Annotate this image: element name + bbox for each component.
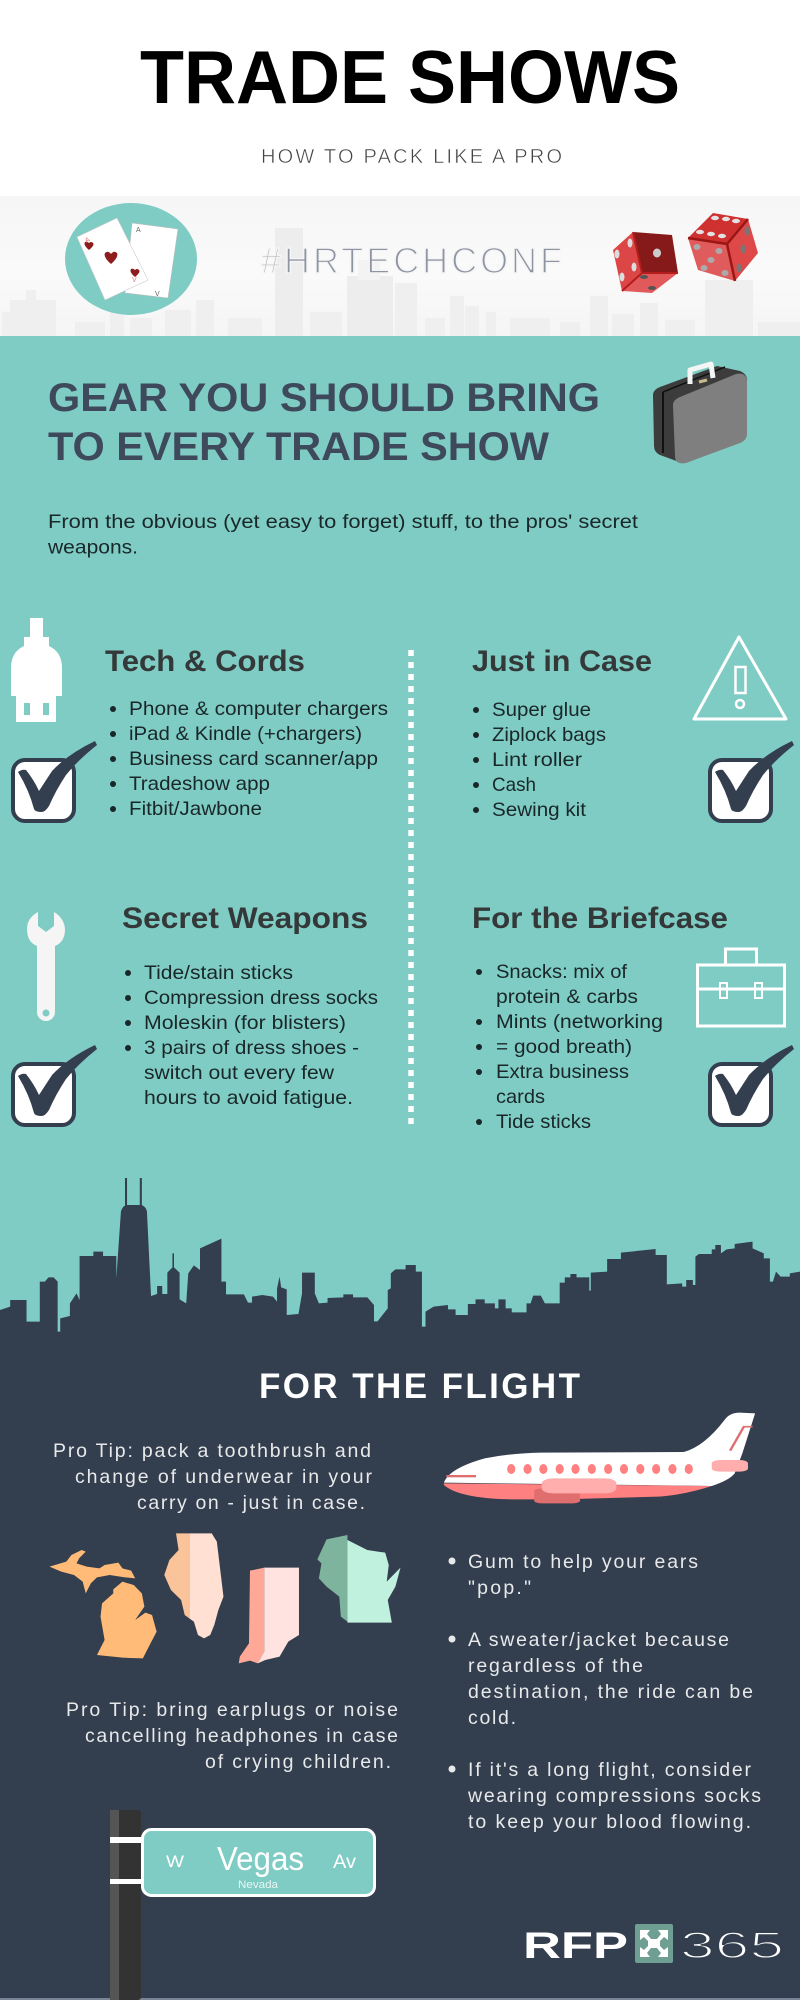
list: secret weapons: Compression dress socks: [144, 987, 378, 1009]
pro tip: toothbrush: change of underwear in your: [75, 1466, 372, 1488]
icon: briefcase outline: [697, 949, 785, 1026]
list: tech and cords: iPad & Kindle (+chargers): [129, 723, 362, 745]
subtitle: HOW TO PACK LIKE A PRO: [261, 146, 562, 168]
pro tip: toothbrush: carry on - just in case.: [137, 1492, 365, 1514]
heading: just in case: Just in Case: [472, 645, 652, 678]
pro tip: toothbrush: Pro Tip: pack a toothbrush and: [53, 1440, 371, 1462]
list: flight items: destination, the ride can be: [468, 1681, 753, 1703]
list: secret weapons: hours to avoid fatigue.: [144, 1087, 353, 1109]
icon: checkbox just in case: [710, 741, 794, 821]
list: tech and cords: Tradeshow app: [129, 773, 270, 795]
list: for the briefcase: Extra business: [496, 1061, 629, 1083]
list: for the briefcase: Tide sticks: [496, 1111, 591, 1133]
icon: street sign Vegas: W: [166, 1852, 184, 1871]
list: just in case: [473, 699, 606, 821]
list: just in case: Cash: [492, 774, 536, 796]
list: tech and cords: [110, 698, 388, 820]
heading: secret weapons: Secret Weapons: [122, 902, 368, 935]
pro tip: earplugs: cancelling headphones in case: [85, 1725, 398, 1747]
icon: four midwest states: [49, 1533, 401, 1663]
icon: checkbox briefcase: [710, 1045, 794, 1125]
icon: usb plug: [11, 618, 62, 722]
list: flight items: "pop.": [468, 1577, 531, 1599]
list: for the briefcase: [476, 961, 663, 1133]
intro text: weapons.: [47, 536, 138, 558]
list: secret weapons: 3 pairs of dress shoes -: [144, 1037, 359, 1059]
icon: street sign Vegas: Vegas: [217, 1840, 304, 1877]
hashtag: #HRTECHCONF: [261, 240, 562, 281]
heading: tech and cords: Tech & Cords: [105, 645, 305, 678]
pro tip: earplugs: Pro Tip: bring earplugs or noise: [66, 1699, 398, 1721]
icon: warning triangle: [694, 637, 786, 719]
city skyline silhouette: [0, 1178, 800, 1337]
pro tip: toothbrush: [53, 1440, 372, 1514]
list: just in case: Lint roller: [492, 749, 583, 771]
icon: playing cards in teal circle: [65, 203, 197, 315]
heading: for the flight: FOR THE FLIGHT: [259, 1367, 580, 1406]
heading: for the briefcase: For the Briefcase: [472, 902, 728, 935]
icon: checkbox tech: [13, 741, 97, 821]
intro text: [47, 511, 639, 558]
panel: teal gear section: [0, 336, 800, 1336]
list: just in case: Ziplock bags: [492, 724, 606, 746]
logo: RFP 365: [523, 1924, 784, 1966]
list: for the briefcase: = good breath): [496, 1036, 632, 1058]
list: flight items: If it's a long flight, consider: [468, 1759, 752, 1781]
icon: street sign Vegas: Av: [333, 1852, 357, 1873]
heading: gear you should bring: [48, 376, 600, 469]
icon: playing cards in teal circle: A: [84, 236, 91, 245]
list: flight items: [448, 1551, 761, 1833]
icon: wrench: [27, 912, 65, 1021]
title: TRADE SHOWS: [140, 35, 680, 119]
list: just in case: Super glue: [492, 699, 591, 721]
dotted divider: [408, 650, 414, 1125]
intro text: From the obvious (yet easy to forget) stuff, to the pros' secret: [48, 511, 639, 533]
icon: airplane: [444, 1413, 755, 1503]
icon: red dice: [613, 213, 758, 293]
banner: hazy skyline with hashtag: [0, 196, 800, 336]
icon: playing cards in teal circle: V: [132, 277, 137, 284]
icon: street sign Vegas: Nevada: [238, 1879, 279, 1891]
list: secret weapons: Tide/stain sticks: [144, 962, 293, 984]
icon: playing cards in teal circle: V: [155, 291, 160, 298]
heading: gear you should bring: GEAR YOU SHOULD BRING: [48, 376, 600, 420]
list: secret weapons: Moleskin (for blisters): [144, 1012, 346, 1034]
list: flight items: Gum to help your ears: [468, 1551, 698, 1573]
list: just in case: Sewing kit: [492, 799, 587, 821]
pro tip: earplugs: [66, 1699, 398, 1773]
panel: dark flight section: [0, 1335, 800, 2000]
list: secret weapons: [125, 962, 378, 1109]
list: for the briefcase: Mints (networking: [496, 1011, 663, 1033]
bottom edge line: [0, 1998, 800, 2000]
list: flight items: regardless of the: [468, 1655, 643, 1677]
icon: suitcase: [653, 364, 747, 463]
list: flight items: wearing compressions socks: [467, 1785, 761, 1807]
logo: RFP 365: 365: [680, 1925, 784, 1966]
list: tech and cords: Phone & computer chargers: [129, 698, 388, 720]
list: for the briefcase: protein & carbs: [496, 986, 638, 1008]
list: secret weapons: switch out every few: [144, 1062, 335, 1084]
heading: gear you should bring: TO EVERY TRADE SHOW: [48, 425, 549, 469]
list: flight items: to keep your blood flowing.: [468, 1811, 751, 1833]
list: flight items: cold.: [468, 1707, 516, 1729]
list: for the briefcase: cards: [496, 1086, 545, 1108]
list: tech and cords: Business card scanner/app: [129, 748, 378, 770]
icon: playing cards in teal circle: A: [136, 227, 141, 234]
list: for the briefcase: Snacks: mix of: [496, 961, 628, 983]
icon: checkbox secret weapons: [13, 1045, 97, 1125]
pro tip: earplugs: of crying children.: [205, 1751, 391, 1773]
list: flight items: A sweater/jacket because: [468, 1629, 729, 1651]
list: tech and cords: Fitbit/Jawbone: [129, 798, 262, 820]
icon: street sign Vegas: [110, 1810, 374, 2000]
logo: RFP 365: RFP: [523, 1925, 628, 1966]
